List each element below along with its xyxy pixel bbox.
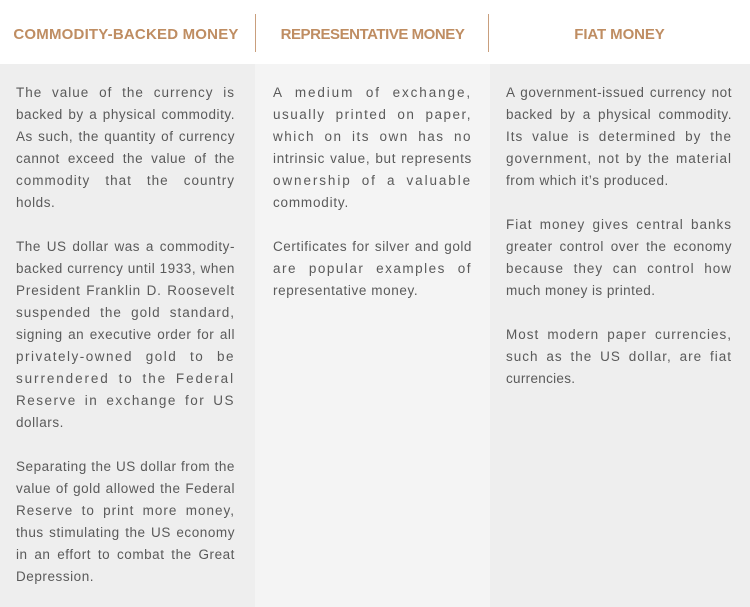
text block: fiat description: such as the US dollar, are fiat: [506, 349, 732, 364]
text block: commodity-backed description: Depression.: [16, 569, 94, 584]
text block: representative description: are popular examples of: [273, 261, 472, 276]
text block: fiat description: greater control over the economy: [506, 239, 732, 254]
text block: fiat description: backed by a physical commodity.: [506, 107, 732, 122]
text block: fiat description: because they can control how: [506, 261, 732, 276]
text block: commodity-backed description: Separating the US dollar from the: [16, 459, 235, 474]
text block: commodity-backed description: surrendered to the Federal: [16, 371, 235, 386]
text block: fiat description: government, not by the material: [506, 151, 732, 166]
text block: representative description: usually printed on paper,: [273, 107, 472, 122]
text block: commodity-backed description: President Franklin D. Roosevelt: [16, 283, 235, 298]
heading: fiat money: FIAT MONEY: [574, 26, 665, 43]
text block: representative description: intrinsic value, but represents: [273, 151, 472, 166]
text block: commodity-backed description: [16, 85, 235, 584]
text block: representative description: [273, 85, 472, 298]
text block: fiat description: currencies.: [506, 371, 575, 386]
text block: commodity-backed description: backed by a physical commodity.: [16, 107, 235, 122]
text block: fiat description: much money is printed.: [506, 283, 655, 298]
text block: fiat description: Most modern paper currencies,: [506, 327, 732, 342]
text block: commodity-backed description: dollars.: [16, 415, 64, 430]
text block: commodity-backed description: holds.: [16, 195, 55, 210]
panel: fiat background: [490, 64, 750, 607]
text block: commodity-backed description: in an effort to combat the Great: [16, 547, 235, 562]
panel: representative background: [255, 64, 490, 607]
text block: fiat description: [506, 85, 732, 386]
text block: commodity-backed description: backed currency until 1933, when: [16, 261, 235, 276]
text block: representative description: commodity.: [273, 195, 349, 210]
text block: representative description: ownership of a valuable: [273, 173, 472, 188]
text block: commodity-backed description: Reserve in exchange for US: [16, 393, 235, 408]
text block: representative description: which on its own has no: [273, 129, 472, 144]
text block: commodity-backed description: Reserve to print more money,: [16, 503, 235, 518]
text block: commodity-backed description: The value of the currency is: [16, 85, 235, 100]
text block: fiat description: from which it’s produced.: [506, 173, 669, 188]
heading: commodity-backed money: COMMODITY-BACKED MONEY: [13, 26, 239, 43]
text block: commodity-backed description: value of gold allowed the Federal: [16, 481, 235, 496]
text block: representative description: A medium of exchange,: [273, 85, 472, 100]
text block: commodity-backed description: cannot exceed the value of the: [16, 151, 235, 166]
text block: representative description: representative money.: [273, 283, 418, 298]
text block: fiat description: A government-issued currency not: [506, 85, 732, 100]
text block: commodity-backed description: suspended the gold standard,: [16, 305, 235, 320]
text block: representative description: Certificates for silver and gold: [273, 239, 472, 254]
text block: fiat description: Its value is determined by the: [506, 129, 732, 144]
text block: commodity-backed description: The US dollar was a commodity-: [16, 239, 235, 254]
text block: commodity-backed description: signing an executive order for all: [16, 327, 235, 342]
panel: commodity-backed background: [0, 64, 255, 607]
text block: fiat description: Fiat money gives central banks: [506, 217, 732, 232]
text block: commodity-backed description: privately-owned gold to be: [16, 349, 235, 364]
text block: commodity-backed description: thus stimulating the US economy: [16, 525, 235, 540]
heading: representative money: REPRESENTATIVE MONEY: [281, 26, 464, 43]
text block: commodity-backed description: As such, the quantity of currency: [16, 129, 235, 144]
text block: commodity-backed description: commodity that the country: [16, 173, 235, 188]
